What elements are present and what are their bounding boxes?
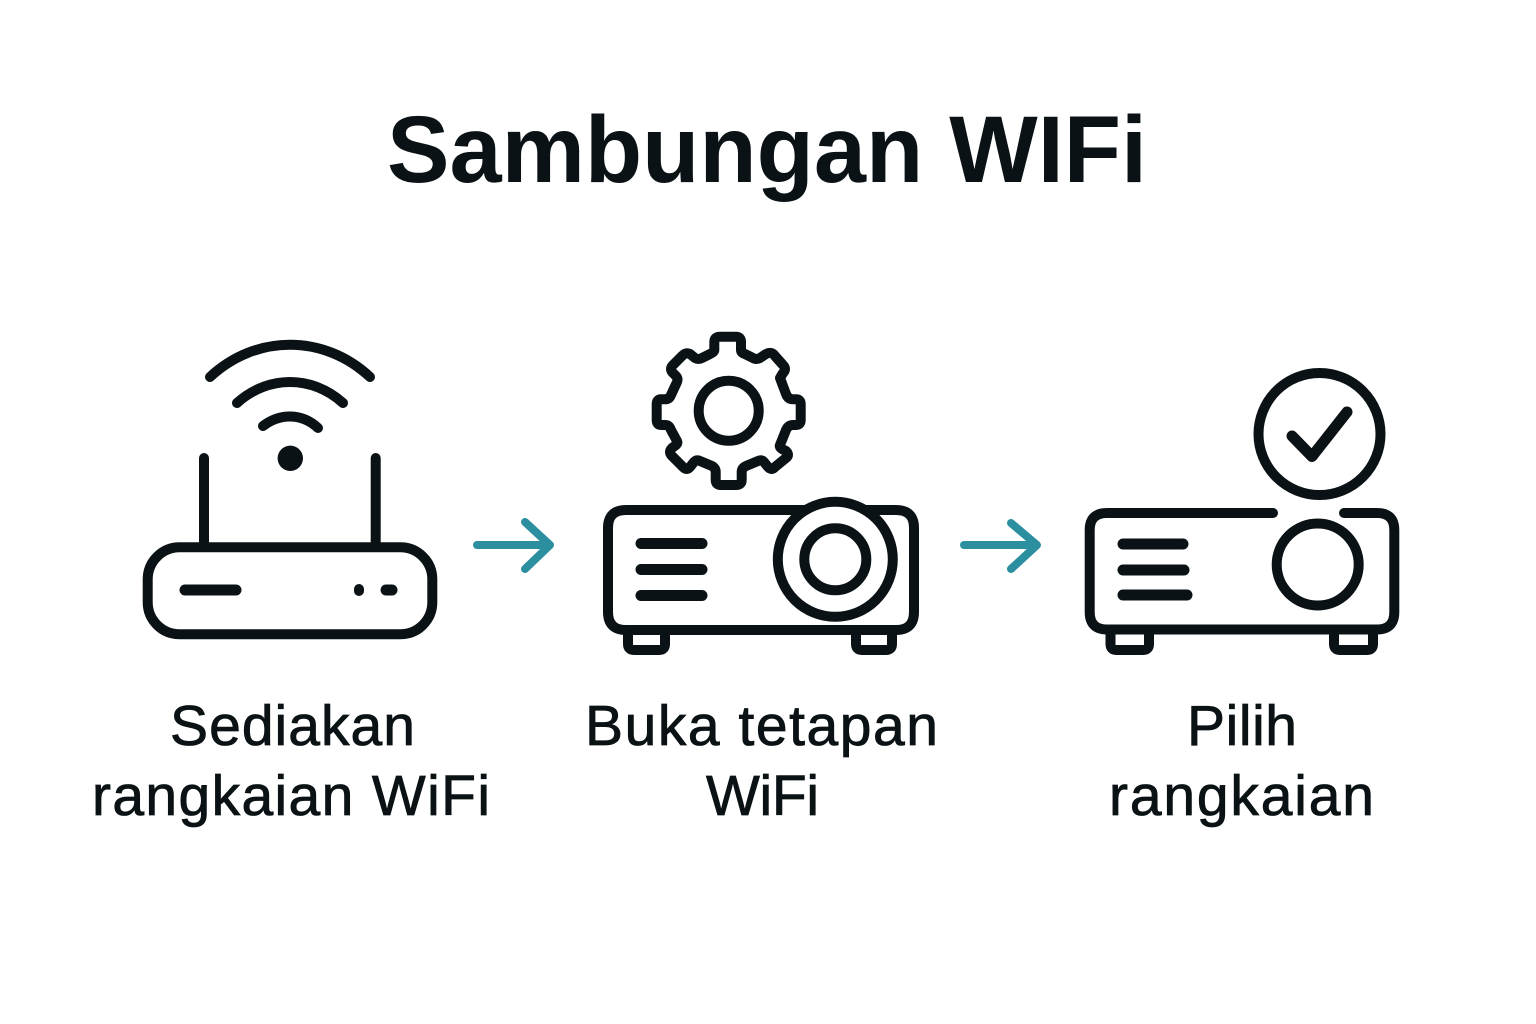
label: step 3: [1109, 694, 1374, 828]
label: step 3: rangkaian: [1109, 764, 1374, 828]
icon: projector with gear: [608, 337, 914, 650]
label: step 2: [585, 694, 938, 828]
icon: projector with check: [1090, 373, 1394, 650]
label: step 1: rangkaian WiFi: [92, 764, 490, 828]
arrow: step 2 to step 3: [964, 523, 1037, 569]
icon: projector body: [608, 502, 914, 650]
label: step 2: Buka tetapan: [585, 694, 938, 758]
label: step 1: [92, 694, 490, 828]
label: step 3: Pilih: [1187, 694, 1297, 758]
icon: gear: [657, 337, 801, 485]
arrow: step 1 to step 2: [477, 522, 550, 569]
label: step 1: Sediakan: [170, 694, 415, 758]
title: Sambungan WIFi: [387, 97, 1147, 203]
icon: WiFi router: [148, 345, 432, 634]
label: step 2: WiFi: [706, 764, 819, 828]
icon: projector body: [1090, 513, 1394, 650]
icon: check circle: [1258, 373, 1380, 495]
